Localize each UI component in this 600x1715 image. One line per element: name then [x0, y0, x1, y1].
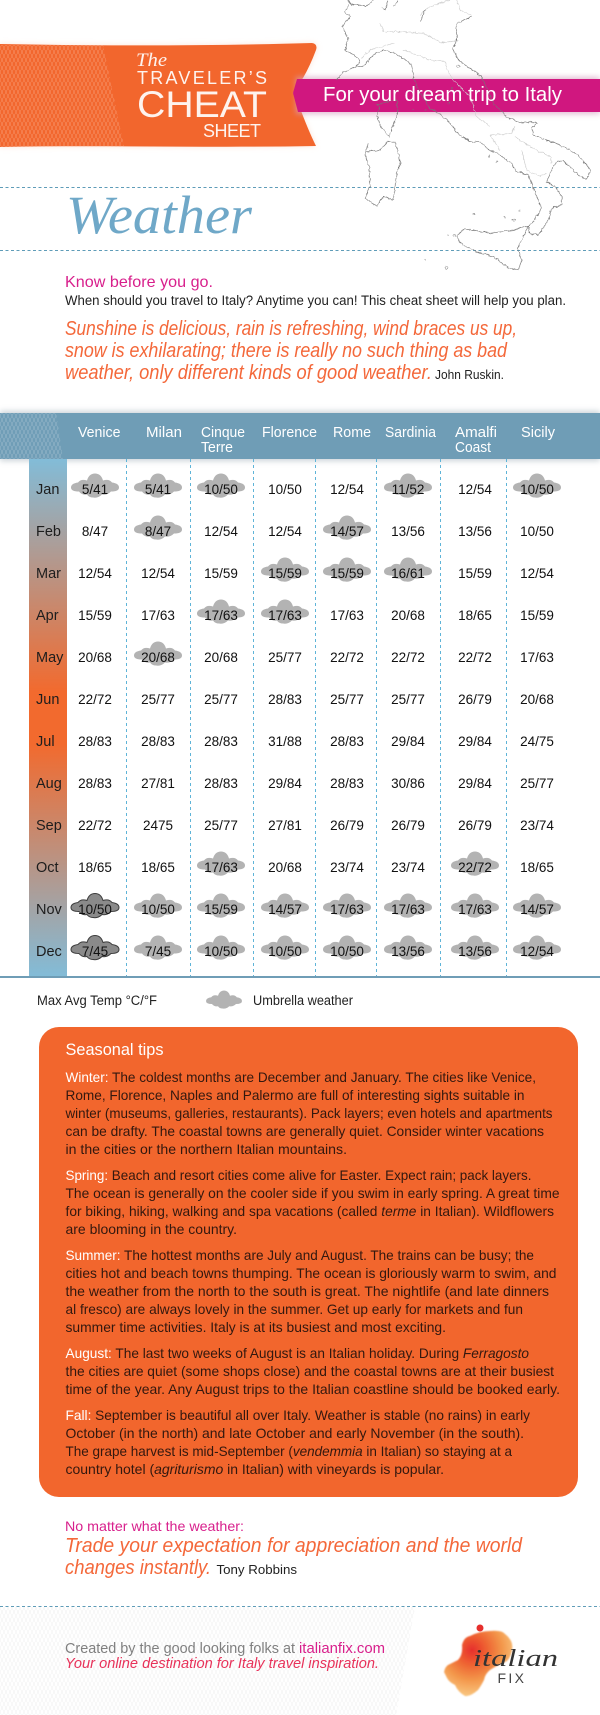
row: January: 10/50 [204, 482, 238, 497]
row: July: 24/75 [520, 734, 554, 749]
heading: Weather: Weather [66, 185, 253, 245]
August tips: the cities are quiet (some shops close) and the coastal towns are at their busiest [66, 1364, 554, 1379]
spring tips: for biking, hiking, walking and spa vacations (called terme in Italian). Wildflowers [66, 1204, 554, 1219]
row: September: 23/74 [520, 818, 554, 833]
footer credits: Created by the good looking folks at [65, 1641, 295, 1657]
table header bar: Sardinia [385, 425, 437, 441]
row: January: 10/50 [520, 482, 554, 497]
row: October: 17/63 [204, 860, 238, 875]
row: November: 17/63 [330, 902, 364, 917]
row: December: 13/56 [458, 944, 492, 959]
fall tips: October (in the north) and late October and early November (in the south). [66, 1426, 524, 1441]
fall tips: Fall: September is beautiful all over Italy. Weather is stable (no rains) in early [66, 1408, 530, 1423]
row: December: 13/56 [391, 944, 425, 959]
row: July: 31/88 [268, 734, 302, 749]
summer tips: Summer: The hottest months are July and August. The trains can be busy; the [66, 1248, 534, 1263]
logo: Italian Fix [444, 1624, 558, 1696]
closing quote [65, 1518, 523, 1579]
row: May: 22/72 [330, 650, 364, 665]
row: July: 28/83 [204, 734, 238, 749]
row: March: 15/59 [204, 566, 238, 581]
row: October: 22/72 [458, 860, 492, 875]
row: December: 10/50 [204, 944, 238, 959]
row: February: 10/50 [520, 524, 554, 539]
row: June: Jun [36, 692, 59, 708]
row: May: 17/63 [520, 650, 554, 665]
fall tips: country hotel (agriturismo in Italian) with vineyards is popular. [66, 1462, 444, 1477]
intro text [65, 274, 566, 308]
winter tips: can be drafty. The coastal towns are generally quiet. Consider winter vacations [66, 1124, 544, 1139]
row: June: 25/77 [391, 692, 425, 707]
row: July [36, 734, 554, 750]
row: March: 12/54 [78, 566, 112, 581]
banner title text: The [136, 50, 167, 71]
summer tips: the weather from the north to the south is great. The nightlife (and late dinners [66, 1284, 549, 1299]
Ruskin quote [65, 318, 517, 384]
Ruskin quote: Sunshine is delicious, rain is refreshing, wind braces us up, [65, 318, 517, 340]
banner title text: SHEET [203, 121, 261, 141]
closing quote: Tony Robbins [216, 1562, 297, 1577]
row: April [36, 600, 554, 624]
row: May: 20/68 [204, 650, 238, 665]
spring tips [66, 1168, 560, 1237]
row: June: 28/83 [268, 692, 302, 707]
row: February: 13/56 [391, 524, 425, 539]
row: April: Apr [36, 608, 59, 624]
row: September: Sep [36, 818, 62, 834]
August tips: time of the year. Any August trips to the Italian coastline should be booked early. [66, 1382, 560, 1397]
row: August [36, 776, 554, 792]
Ruskin quote: weather, only different kinds of good weather. [65, 362, 432, 384]
row: November: 17/63 [458, 902, 492, 917]
August tips: August: The last two weeks of August is an Italian holiday. During Ferragosto [66, 1346, 529, 1361]
row: July: 29/84 [391, 734, 425, 749]
row: January: 10/50 [268, 482, 302, 497]
table header bar: Rome [333, 425, 371, 441]
row: November: 14/57 [268, 902, 302, 917]
row: August: 30/86 [391, 776, 425, 791]
dashed header lines [0, 188, 600, 250]
legend: Umbrella weather [253, 993, 353, 1008]
row: June: 26/79 [458, 692, 492, 707]
row: May: 20/68 [141, 650, 175, 665]
legend [37, 990, 353, 1009]
row: September [36, 818, 554, 834]
row: March [36, 558, 554, 582]
row: June [36, 692, 554, 708]
row: April: 15/59 [520, 608, 554, 623]
row: January: 12/54 [330, 482, 364, 497]
winter tips: winter (museums, galleries, restaurants). Pack layers; even hotels and apartments [65, 1106, 553, 1121]
row: March: 12/54 [141, 566, 175, 581]
row: June: 25/77 [330, 692, 364, 707]
summer tips: cities hot and beach towns thumping. The ocean is gloriously warm to swim, and [66, 1266, 556, 1281]
row: March: 12/54 [520, 566, 554, 581]
closing quote: No matter what the weather: [65, 1518, 244, 1534]
row: December: 12/54 [520, 944, 554, 959]
row: April: 20/68 [391, 608, 425, 623]
panel heading: Seasonal tips [66, 1040, 164, 1059]
intro text: When should you travel to Italy? Anytime you can! This cheat sheet will help you plan. [65, 293, 566, 308]
table header bar: Cinque [201, 425, 245, 441]
row: February: 12/54 [204, 524, 238, 539]
summer tips: al fresco) are always lovely in the summer. Get up early for markets and fun [66, 1302, 523, 1317]
row: October: 18/65 [520, 860, 554, 875]
table bottom rule [0, 976, 600, 978]
row: September: 25/77 [204, 818, 238, 833]
row: December: 7/45 [82, 944, 108, 959]
logo: Italian Fix: FIX [498, 1670, 525, 1686]
closing quote: changes instantly. [65, 1557, 211, 1579]
row: January [36, 474, 561, 498]
row: September: 26/79 [458, 818, 492, 833]
table header bar: Milan [146, 425, 182, 441]
row: October: 23/74 [330, 860, 364, 875]
row: November: 10/50 [141, 902, 175, 917]
row: August: 28/83 [330, 776, 364, 791]
row: July: 29/84 [458, 734, 492, 749]
row: February [36, 516, 554, 540]
orange title banner [0, 43, 316, 147]
summer tips [66, 1248, 556, 1335]
row: November: Nov [36, 902, 63, 918]
row: May: 20/68 [78, 650, 112, 665]
row: October: Oct [36, 860, 59, 876]
row: March: 15/59 [330, 566, 364, 581]
banner title text: CHEAT [137, 84, 267, 125]
row: December: 7/45 [145, 944, 171, 959]
banner title text: TRAVELER’S [137, 68, 267, 88]
row: July: 28/83 [141, 734, 175, 749]
row: January: Jan [36, 482, 59, 498]
row: April: 17/63 [268, 608, 302, 623]
row: May: 22/72 [391, 650, 425, 665]
row: January: 5/41 [82, 482, 108, 497]
row: October: 18/65 [78, 860, 112, 875]
row: February: 13/56 [458, 524, 492, 539]
footer credits: Your online destination for Italy travel inspiration. [65, 1656, 379, 1672]
row: February: 12/54 [268, 524, 302, 539]
winter tips: in the cities or the northern Italian mountains. [66, 1142, 347, 1157]
row: March: Mar [36, 566, 61, 582]
row: April: 17/63 [330, 608, 364, 623]
row: February: Feb [36, 524, 61, 540]
row: July: 28/83 [78, 734, 112, 749]
row: November: 15/59 [204, 902, 238, 917]
row: December: 10/50 [330, 944, 364, 959]
row: August: 25/77 [520, 776, 554, 791]
footer pattern [0, 1607, 415, 1715]
row: April: 17/63 [204, 608, 238, 623]
table header bar: Amalfi [455, 425, 497, 441]
August tips [66, 1346, 560, 1397]
row: June: 20/68 [520, 692, 554, 707]
row: December [36, 936, 561, 960]
row: November [36, 894, 561, 918]
legend: Max Avg Temp °C/°F [37, 993, 157, 1008]
row: October: 23/74 [391, 860, 425, 875]
row: January: 12/54 [458, 482, 492, 497]
Ruskin quote: snow is exhilarating; there is really no such thing as bad [65, 340, 508, 362]
row: November: 17/63 [391, 902, 425, 917]
table header bar: Venice [78, 425, 120, 441]
spring tips: Spring: Beach and resort cities come alive for Easter. Expect rain; pack layers. [66, 1168, 532, 1183]
footer credits [65, 1641, 385, 1672]
row: August: 28/83 [78, 776, 112, 791]
row: March: 15/59 [458, 566, 492, 581]
fall tips [66, 1408, 530, 1477]
table header bar: Terre [201, 440, 233, 456]
row: August: 29/84 [268, 776, 302, 791]
spring tips: are blooming in the country. [66, 1222, 237, 1237]
Ruskin quote: John Ruskin. [435, 367, 504, 382]
month gradient column [29, 459, 67, 977]
banner title text [136, 50, 267, 141]
row: January: 5/41 [145, 482, 171, 497]
dashed column dividers [126, 459, 506, 977]
winter tips [65, 1070, 553, 1157]
row: April: 18/65 [458, 608, 492, 623]
fall tips: The grape harvest is mid-September (vendemmia in Italian) so staying at a [66, 1444, 512, 1459]
row: July: Jul [36, 734, 55, 750]
row: September: 2475 [143, 818, 173, 833]
row: September: 26/79 [391, 818, 425, 833]
row: October: 18/65 [141, 860, 175, 875]
footer credits: italianfix.com [299, 1641, 385, 1657]
row: November: 14/57 [520, 902, 554, 917]
row: June: 25/77 [204, 692, 238, 707]
summer tips: summer time activities. Italy is at its busiest and most exciting. [66, 1320, 446, 1335]
row: May: May [36, 650, 64, 666]
row: May [36, 642, 554, 666]
table header bar: Sicily [521, 425, 556, 441]
intro text: Know before you go. [65, 274, 213, 291]
row: October: 20/68 [268, 860, 302, 875]
row: December: Dec [36, 944, 62, 960]
spring tips: The ocean is generally on the cooler side if you swim in early spring. A great time [66, 1186, 560, 1201]
row: April: 15/59 [78, 608, 112, 623]
row: August: Aug [36, 776, 62, 792]
logo: Italian Fix: italian [473, 1646, 558, 1672]
row: August: 28/83 [204, 776, 238, 791]
row: May: 25/77 [268, 650, 302, 665]
map of Italy outline [336, 0, 591, 270]
row: August: 29/84 [458, 776, 492, 791]
row: August: 27/81 [141, 776, 175, 791]
panel: seasonal tips [39, 1027, 578, 1497]
row: September: 22/72 [78, 818, 112, 833]
closing quote: Trade your expectation for appreciation and the world [65, 1535, 523, 1557]
row: January: 11/52 [392, 482, 424, 497]
row: October [36, 852, 554, 876]
row: September: 27/81 [268, 818, 302, 833]
row: November: 10/50 [78, 902, 112, 917]
row: March: 16/61 [391, 566, 425, 581]
row: December: 10/50 [268, 944, 302, 959]
row: February: 14/57 [330, 524, 364, 539]
winter tips: Winter: The coldest months are December and January. The cities like Venice, [66, 1070, 536, 1085]
row: February: 8/47 [82, 524, 108, 539]
ribbon text: For your dream trip to Italy [323, 84, 562, 106]
table header bar: Coast [455, 440, 491, 456]
row: July: 28/83 [330, 734, 364, 749]
row: April: 17/63 [141, 608, 175, 623]
magenta subtitle ribbon [293, 77, 600, 114]
footer dashed line [0, 1606, 600, 1608]
table header bar [0, 411, 600, 461]
row: May: 22/72 [458, 650, 492, 665]
row: March: 15/59 [268, 566, 302, 581]
row: June: 22/72 [78, 692, 112, 707]
table header bar: Florence [262, 425, 317, 441]
winter tips: Rome, Florence, Naples and Palermo are full of interesting sights suitable in [66, 1088, 524, 1103]
row: February: 8/47 [145, 524, 171, 539]
row: June: 25/77 [141, 692, 175, 707]
row: September: 26/79 [330, 818, 364, 833]
